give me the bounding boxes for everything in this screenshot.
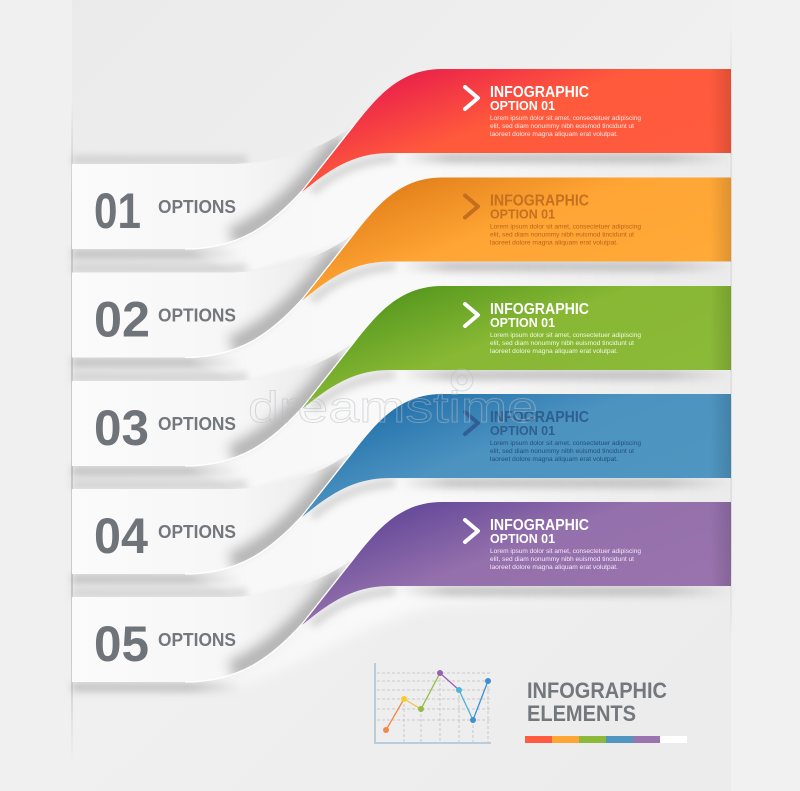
white tab 03 <box>72 342 354 466</box>
blue banner: INFOGRAPHIC <box>490 409 589 426</box>
white tab 03: OPTIONS <box>158 414 236 434</box>
white tab 02: 02 <box>94 292 150 348</box>
green banner: laoreet dolore magna aliquam erat volutpat. <box>490 348 618 355</box>
ribbon row 5 <box>72 502 731 682</box>
red banner: elit, sed diam nonummy nibh euismod tincidunt ut <box>490 123 634 130</box>
ribbon row 4 <box>72 394 731 574</box>
white tab 05 <box>72 558 354 682</box>
watermark: dreamstime <box>248 383 538 432</box>
ribbon row 2 <box>72 178 731 358</box>
white tab 01: OPTIONS <box>158 197 236 217</box>
white tab 04: 04 <box>94 508 148 564</box>
blue banner <box>302 394 731 517</box>
orange banner: Lorem ipsum dolor sit amet, consectetuer adipiscing <box>490 224 641 230</box>
ribbon row 3 <box>72 286 731 466</box>
white tab 05: 05 <box>94 616 149 672</box>
purple banner <box>302 502 731 625</box>
orange banner: elit, sed diam nonummy nibh euismod tincidunt ut <box>490 232 634 238</box>
blue banner: OPTION 01 <box>490 423 555 438</box>
white tab 04 <box>72 450 354 574</box>
ribbon row 1 <box>72 69 731 249</box>
red banner: INFOGRAPHIC <box>490 84 589 101</box>
red banner <box>302 69 731 192</box>
purple banner: Lorem ipsum dolor sit amet, consectetuer adipiscing <box>490 548 641 555</box>
orange banner: laoreet dolore magna aliquam erat volutpat. <box>490 240 618 246</box>
red banner: Lorem ipsum dolor sit amet, consectetuer adipiscing <box>490 115 641 122</box>
orange banner: OPTION 01 <box>490 206 555 222</box>
blue banner: elit, sed diam nonummy nibh euismod tincidunt ut <box>490 448 634 455</box>
green banner: elit, sed diam nonummy nibh euismod tincidunt ut <box>490 340 634 347</box>
purple banner: OPTION 01 <box>490 531 555 546</box>
orange banner: INFOGRAPHIC <box>490 192 589 210</box>
line chart <box>375 663 491 743</box>
green banner: INFOGRAPHIC <box>490 301 589 318</box>
blue banner: laoreet dolore magna aliquam erat volutpat. <box>490 456 618 463</box>
footer title <box>527 678 667 726</box>
purple banner: laoreet dolore magna aliquam erat volutpat. <box>490 564 618 571</box>
white wave sheets behind ribbons <box>72 153 731 692</box>
red banner: laoreet dolore magna aliquam erat volutpat. <box>490 131 618 138</box>
blue banner: Lorem ipsum dolor sit amet, consectetuer adipiscing <box>490 440 641 447</box>
purple banner: INFOGRAPHIC <box>490 517 589 534</box>
white tab 03: 03 <box>94 400 149 456</box>
red banner: OPTION 01 <box>490 98 555 113</box>
footer title: INFOGRAPHIC <box>527 678 667 703</box>
white tab 01: 01 <box>94 183 141 239</box>
white tab 02 <box>72 234 354 358</box>
footer title: ELEMENTS <box>527 701 636 726</box>
white tab 05: OPTIONS <box>158 630 236 650</box>
colour bar <box>525 736 687 743</box>
orange banner <box>302 178 731 300</box>
purple banner: elit, sed diam nonummy nibh euismod tincidunt ut <box>490 556 634 563</box>
green banner <box>302 286 731 409</box>
white tab 01 <box>72 125 354 249</box>
white tab 02: OPTIONS <box>158 306 236 326</box>
green banner: OPTION 01 <box>490 315 555 330</box>
green banner: Lorem ipsum dolor sit amet, consectetuer adipiscing <box>490 332 641 339</box>
watermark <box>248 369 538 432</box>
white tab 04: OPTIONS <box>158 522 236 542</box>
